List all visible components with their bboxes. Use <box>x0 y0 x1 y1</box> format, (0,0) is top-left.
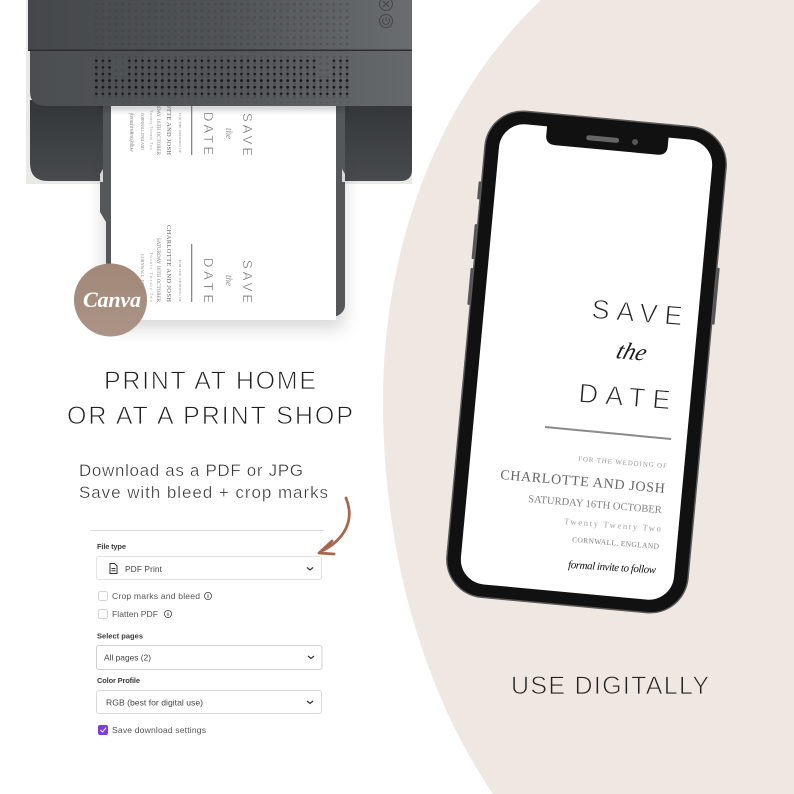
download instructions: Download as a PDF or JPG <box>79 461 303 480</box>
printed save the date, first copy <box>128 80 255 156</box>
download instructions: Save with bleed + crop marks <box>79 483 328 502</box>
select pages field: Select pages <box>97 632 143 640</box>
phone body <box>440 108 733 616</box>
invitation text on phone: CORNWALL, ENGLAND <box>572 535 660 551</box>
printed save the date, first copy: SATURDAY 16TH OCTOBER <box>155 91 160 156</box>
printed save the date, second copy: Twenty Twenty Two <box>149 252 154 302</box>
printed save the date, first copy: Twenty Twenty Two <box>149 110 154 150</box>
paper <box>111 80 336 320</box>
paper shadow <box>104 170 344 328</box>
Canva badge: Canva <box>83 287 141 312</box>
download instructions <box>79 461 328 502</box>
printed save the date, second copy: DATE <box>201 258 216 303</box>
color profile field: Color Profile <box>97 676 140 685</box>
save settings checkbox: Save download settings <box>112 725 206 735</box>
invitation text on phone: DATE <box>578 378 672 415</box>
file type field <box>96 542 322 580</box>
invitation text on phone: CHARLOTTE AND JOSH <box>500 468 665 497</box>
invitation text on phone: the <box>613 338 651 366</box>
heading: print at home: OR AT A PRINT SHOP <box>67 402 353 430</box>
printer front panel <box>30 50 412 106</box>
arrow <box>319 498 349 554</box>
dark speaker dots <box>93 58 351 97</box>
printed save the date, first copy: CORNWALL, ENGLAND <box>139 113 145 150</box>
heading: print at home: PRINT AT HOME <box>104 367 316 395</box>
file type field: PDF Print <box>125 564 163 574</box>
flatten PDF option: Flatten PDF <box>112 609 158 619</box>
invitation text on phone: formal invite to follow <box>568 559 657 576</box>
panel seam <box>28 50 412 51</box>
printer top panel <box>28 0 412 50</box>
invitation text on phone: FOR THE WEDDING OF <box>578 455 667 470</box>
printer backdrop <box>26 0 412 184</box>
Canva badge <box>74 264 147 336</box>
invitation text on phone: SAVE <box>591 294 684 331</box>
color profile field: RGB (best for digital use) <box>106 698 203 708</box>
phone mockup <box>440 108 733 616</box>
printed save the date, second copy: SATURDAY 16TH OCTOBER <box>155 238 160 303</box>
printed save the date, first copy: the <box>224 128 234 139</box>
printer lower body left <box>30 100 103 181</box>
beige background curve <box>383 0 794 794</box>
download settings panel <box>90 530 324 735</box>
invitation text on phone: SATURDAY 16TH OCTOBER <box>528 494 662 516</box>
printed save the date, second copy: SAVE <box>240 260 255 303</box>
invitation text on phone <box>500 294 684 576</box>
printer with printed paper <box>26 0 412 328</box>
heading: print at home <box>67 367 353 430</box>
paper tray <box>100 106 345 316</box>
color profile field <box>96 676 322 714</box>
crop marks option: Crop marks and bleed <box>112 591 200 601</box>
heading: use digitally: USE DIGITALLY <box>511 672 709 700</box>
printed save the date, second copy: CORNWALL, ENGLAND <box>139 254 145 300</box>
select pages field: All pages (2) <box>104 652 151 662</box>
printer lower body right <box>337 100 412 181</box>
printed save the date, first copy: FOR THE WEDDING OF <box>178 113 182 153</box>
printed save the date, second copy: the <box>224 275 234 286</box>
printed save the date, first copy: CHARLOTTE AND JOSH <box>165 80 172 155</box>
invitation text on phone: Twenty Twenty Two <box>564 516 661 534</box>
printer buttons <box>380 0 392 28</box>
printed save the date, second copy <box>139 225 255 303</box>
printed save the date, first copy: formal invite to follow <box>128 113 135 152</box>
printed save the date, first copy: SAVE <box>240 113 255 156</box>
printed save the date, first copy: DATE <box>201 112 216 155</box>
select pages field <box>96 632 322 670</box>
printed save the date, second copy: FOR THE WEDDING OF <box>178 260 182 302</box>
shadow under printer lid <box>100 104 345 110</box>
perforated dots <box>93 1 351 103</box>
file type field: File type <box>97 542 126 551</box>
flatten PDF option <box>98 609 172 619</box>
printed save the date, second copy: CHARLOTTE AND JOSH <box>165 225 172 302</box>
tray tabs <box>100 169 345 182</box>
